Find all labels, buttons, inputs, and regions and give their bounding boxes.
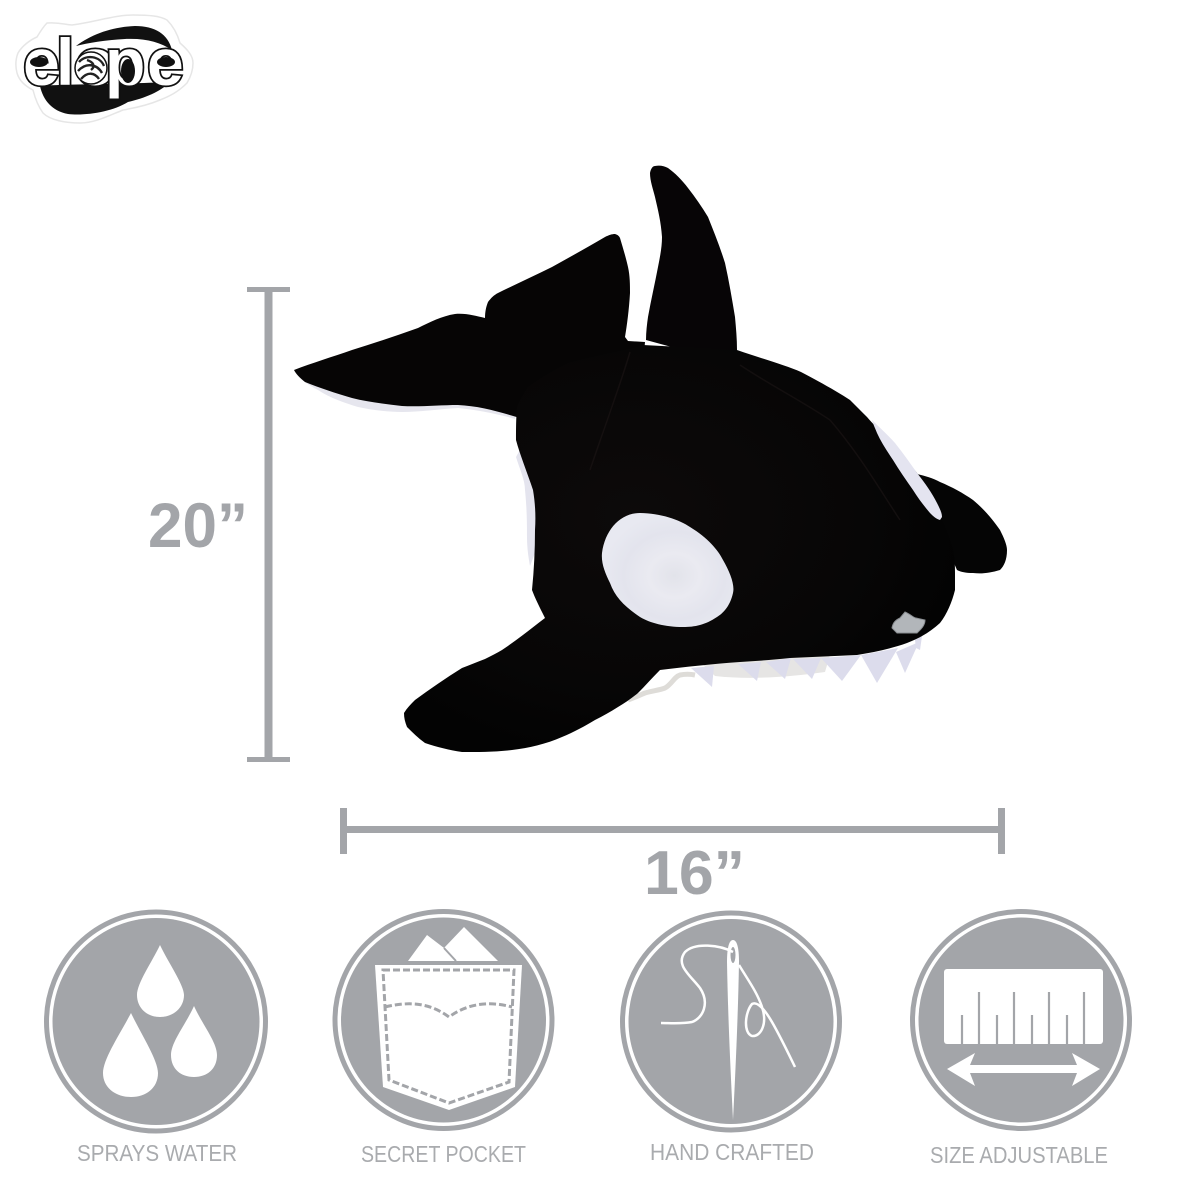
icon: three water drops [103,945,217,1097]
far eye patch [872,420,942,520]
gum strip behind teeth [700,655,830,678]
white belly edge [516,450,540,566]
badge: hand crafted [622,913,840,1165]
tail fluke [294,234,645,418]
label: size adjustable: SIZE ADJUSTABLE [930,1142,1108,1168]
elastic cord [628,674,695,700]
velvet seams [590,352,900,520]
dimension: height 20 inches: 20” [148,491,248,561]
right pectoral fin [917,474,1007,573]
teeth [691,636,922,687]
label: sprays water: SPRAYS WATER [77,1140,237,1166]
nose crystal [892,612,925,633]
icon: needle and thread [661,940,795,1120]
badge: sprays water [46,912,266,1166]
white underside of tail [295,372,520,419]
eye patch [602,513,733,627]
icon: ruler with arrow [944,969,1103,1086]
body and flipper [404,345,955,752]
label: secret pocket: SECRET POCKET [361,1141,526,1167]
dimension: width 16 inches: 16” [644,839,745,908]
icon: pocket with square [375,927,522,1110]
dimension: height 20 inches [148,287,290,762]
badge: secret pocket [335,912,552,1167]
logo: elope: elope [23,25,184,99]
orca plush hat [294,166,1007,752]
dorsal fin [646,166,737,370]
badge: size adjustable [912,912,1130,1168]
dimension: width 16 inches [340,808,1005,908]
logo: elope [16,15,193,123]
label: hand crafted: HAND CRAFTED [650,1139,814,1165]
